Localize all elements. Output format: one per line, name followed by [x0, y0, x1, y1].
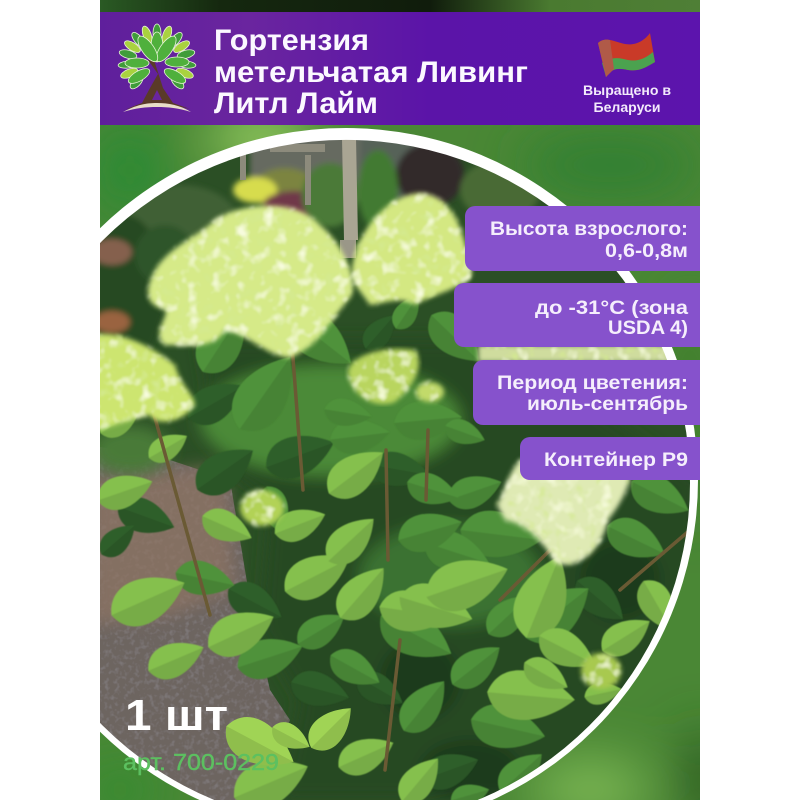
foliage mass — [100, 358, 665, 800]
panel: frost hardiness: USDA 4) — [608, 318, 688, 339]
stems — [150, 345, 690, 770]
gravel path — [90, 445, 290, 800]
panel: height: 0,6-0,8м — [605, 241, 688, 262]
panel: container: Контейнер Р9 — [544, 450, 688, 471]
header band — [100, 12, 700, 125]
title: Литл Лайм — [214, 87, 378, 120]
fence post — [342, 138, 358, 240]
title: Гортензия — [214, 24, 369, 57]
leaves: bright green — [92, 398, 687, 800]
panel: frost hardiness — [454, 283, 700, 347]
logo: tree — [118, 24, 196, 112]
article number: арт. 700-0229 — [123, 749, 279, 775]
infographic canvas — [100, 0, 700, 800]
caption: grown in Belarus — [584, 86, 670, 115]
panel: height: Высота взрослого: — [490, 219, 688, 240]
tree leaves — [118, 24, 196, 91]
panel: flowering period: Период цветения: — [497, 373, 688, 394]
panel: flowering period — [473, 360, 700, 425]
icon: Belarus flag — [598, 33, 655, 77]
leaves: mid green — [172, 289, 697, 800]
title: метельчатая Ливинг — [214, 56, 528, 89]
photo of hydrangea in circular crop — [85, 120, 710, 800]
leaves: dark — [100, 316, 623, 790]
quantity label: 1 шт — [125, 691, 228, 740]
panel: frost hardiness: до -31°С (зона — [535, 298, 689, 319]
tree trunk — [124, 60, 190, 110]
caption: grown in Belarus: Выращено в — [583, 82, 671, 98]
panel: container — [520, 437, 700, 480]
left hydrangea bloom — [90, 334, 195, 430]
white circle outline — [100, 128, 698, 800]
title — [214, 30, 528, 114]
panel: height — [465, 206, 700, 271]
leaves: highlighted yellow-green — [226, 708, 351, 765]
pale bloom behind panels — [478, 345, 670, 362]
panel: flowering period: июль-сентябрь — [527, 394, 688, 415]
big hydrangea bloom — [148, 206, 353, 358]
small green bloom — [348, 349, 419, 404]
white-green bloom lower right — [497, 460, 632, 565]
green flower buds — [240, 382, 621, 689]
garden background — [85, 120, 710, 800]
right hydrangea bloom — [352, 193, 472, 305]
caption: grown in Belarus: Беларуси — [594, 99, 660, 115]
